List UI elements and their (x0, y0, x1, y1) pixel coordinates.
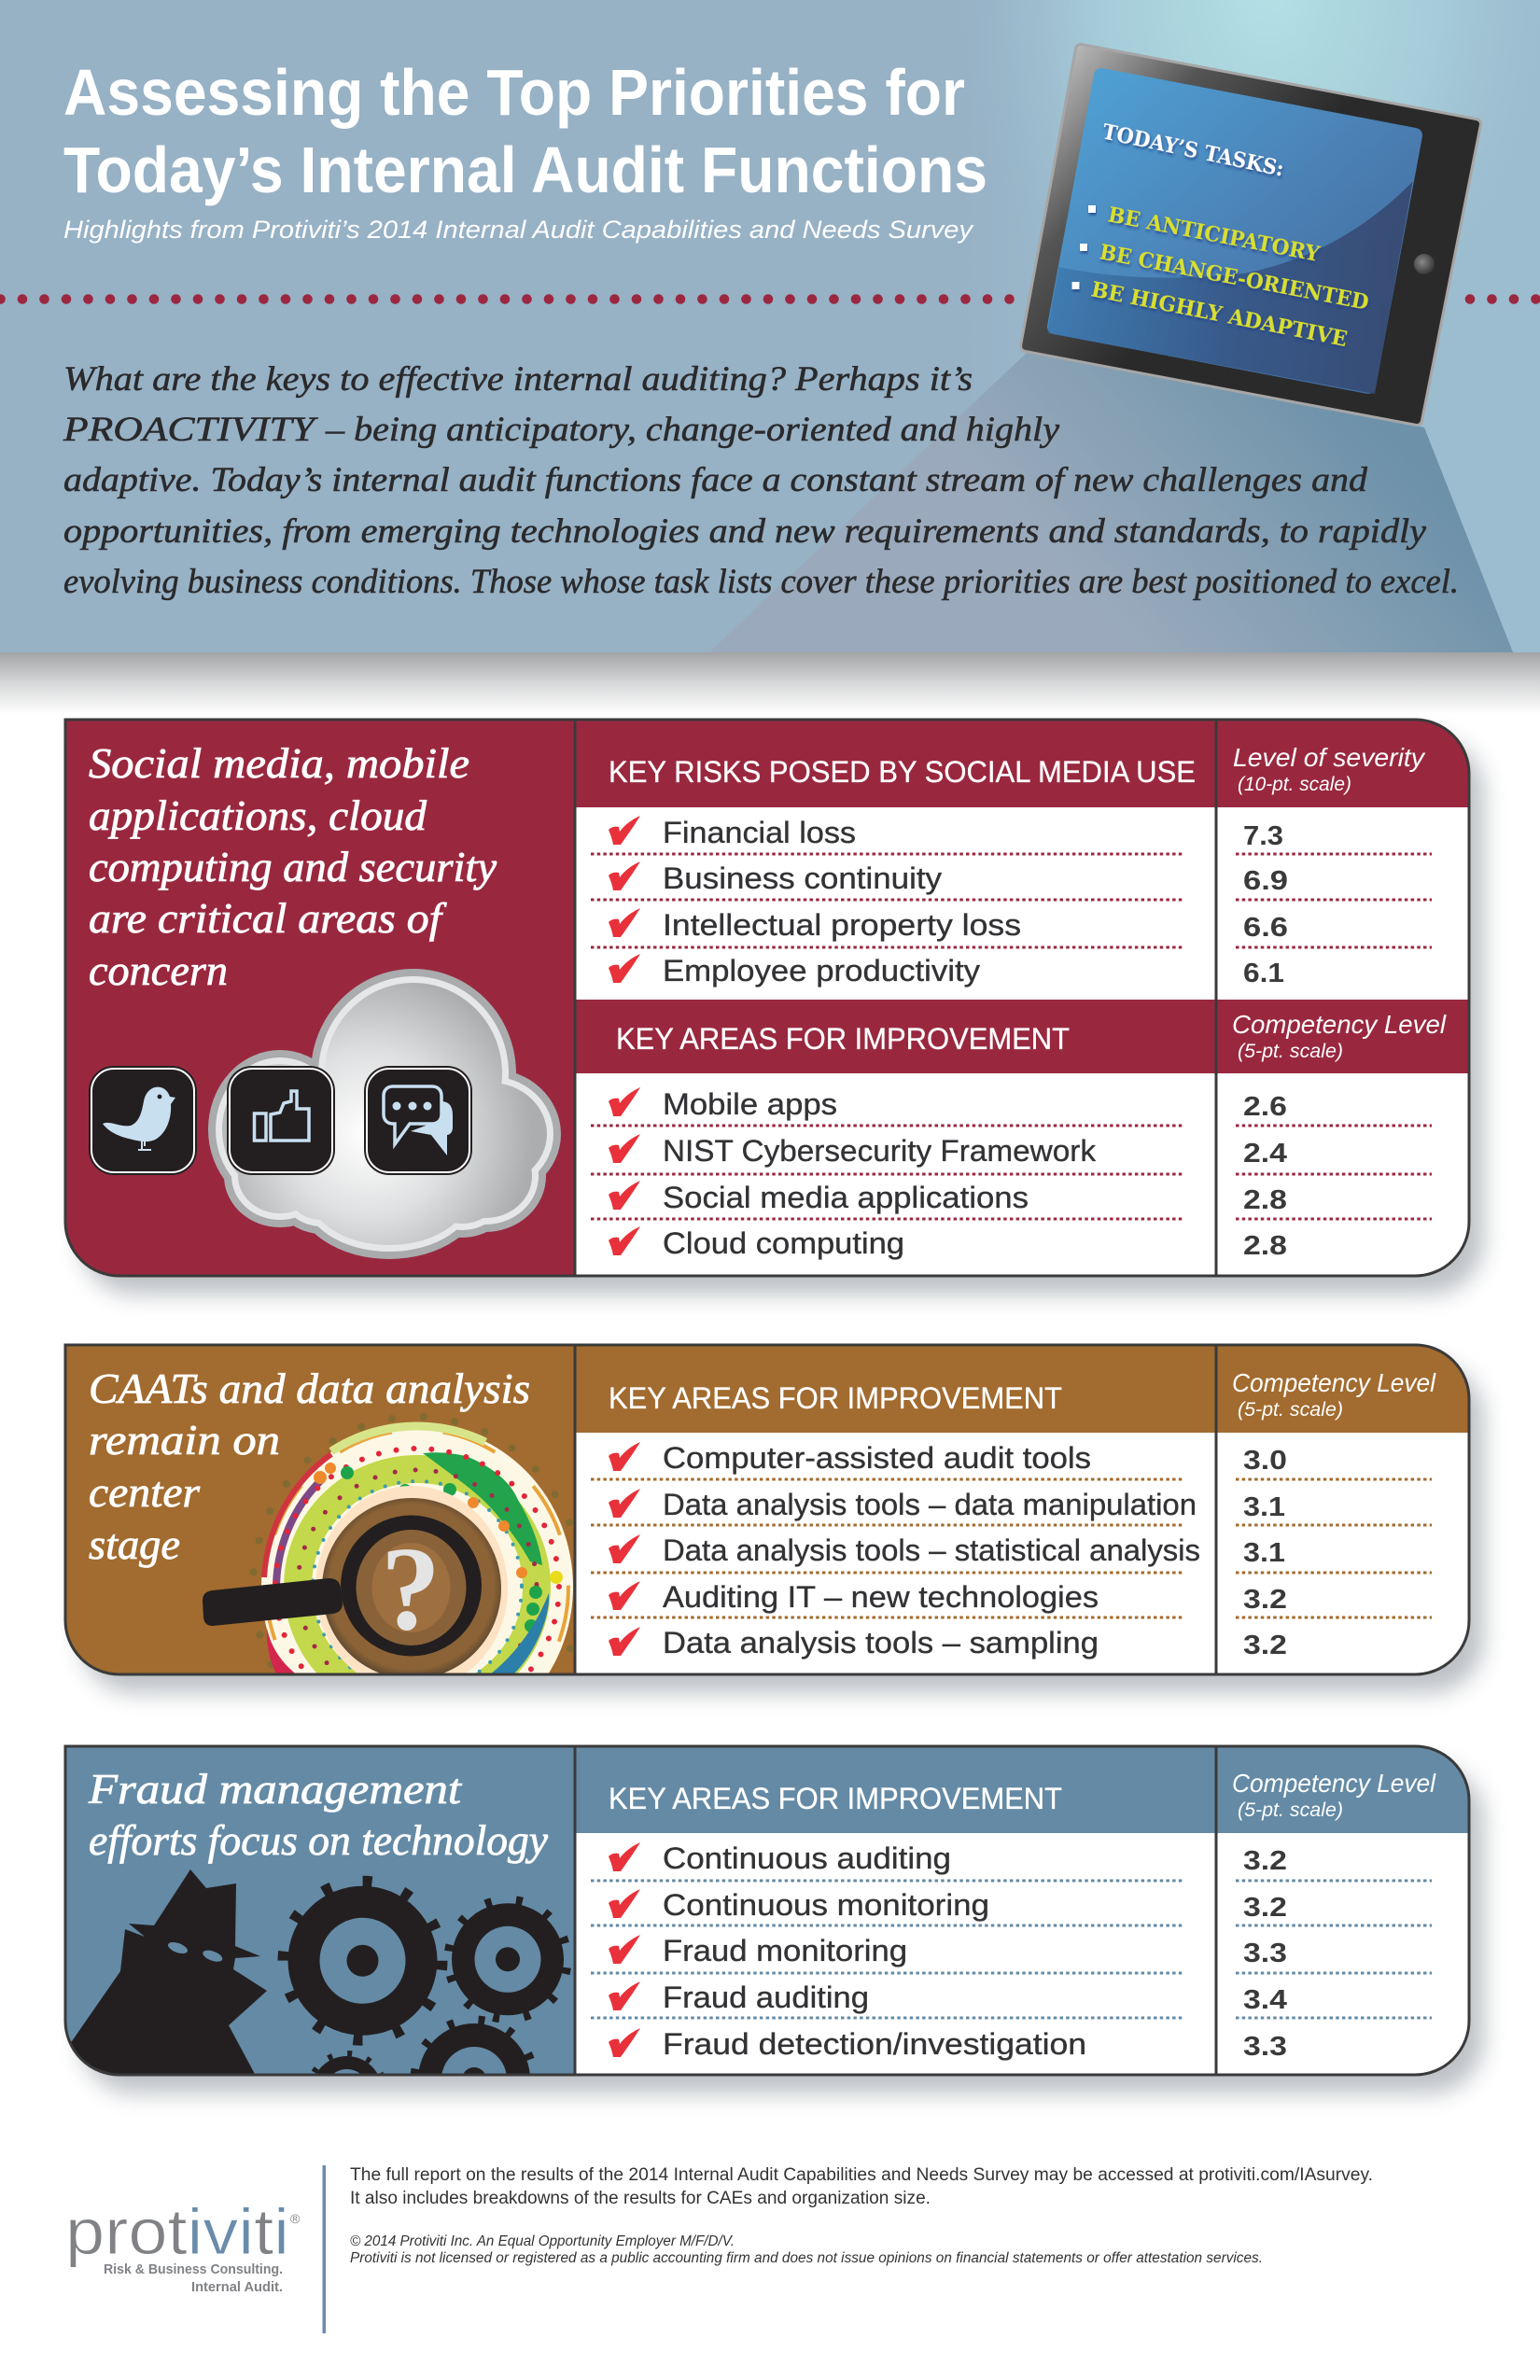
footer text (350, 2165, 1373, 2266)
table rows (591, 1441, 1432, 1660)
table rows: Fraud monitoring (663, 1934, 907, 1967)
table header: key risks (609, 743, 1426, 795)
icon: cloud (208, 969, 561, 1259)
table rows: Fraud auditing (663, 1981, 869, 2014)
table header: KEY AREAS FOR IMPROVEMENT (609, 1381, 1062, 1415)
table rows: key risks: 6.9 (1243, 866, 1288, 896)
table rows: 3.1 (1243, 1492, 1285, 1522)
panel heading: concern (89, 947, 228, 994)
intro paragraph: opportunities, from emerging technologies and new requirements and standards, to rapidly (63, 512, 1427, 551)
panel heading: Social media, mobile (89, 740, 469, 787)
panel: CAATs and data analysis (63, 1344, 1496, 1706)
table header (609, 1368, 1436, 1421)
table rows: 3.0 (1243, 1446, 1287, 1476)
table header: Competency Level (1232, 1769, 1436, 1798)
icon: magnifying glass over colorful swirl (203, 1413, 573, 1673)
table rows: 3.2 (1243, 1893, 1287, 1923)
table header: KEY AREAS FOR IMPROVEMENT (609, 1782, 1062, 1815)
icon: tablet with today's tasks: BE CHANGE-ORIENTED (1098, 240, 1371, 315)
table rows: 3.2 (1243, 1585, 1287, 1615)
icon: thumbs up (227, 1066, 335, 1175)
panel heading (89, 1365, 530, 1568)
table header: (5-pt. scale) (1238, 1799, 1343, 1821)
table rows: key risks: Financial loss (663, 816, 856, 849)
intro paragraph (63, 360, 1459, 601)
panel heading: stage (89, 1521, 180, 1568)
intro paragraph: evolving business conditions. Those whose task lists cover these priorities are best positioned to excel. (63, 563, 1459, 601)
header bottom shadow (0, 652, 1540, 714)
icon: tablet with today's tasks (1026, 49, 1476, 420)
table rows: 3.2 (1243, 1846, 1287, 1876)
icon: tablet with today's tasks: BE HIGHLY ADAPTIVE (1089, 277, 1350, 352)
header background (0, 0, 1540, 652)
panel heading: center (89, 1469, 201, 1516)
table rows: Data analysis tools – sampling (663, 1626, 1099, 1659)
table header: Competency Level (1232, 1368, 1436, 1397)
table rows: key risks (591, 816, 1432, 988)
footer text: © 2014 Protiviti Inc. An Equal Opportunity Employer M/F/D/V. (350, 2233, 735, 2249)
intro paragraph: – being anticipatory, change-oriented and highly (325, 411, 1060, 449)
table rows: Auditing IT – new technologies (663, 1580, 1099, 1614)
table rows: key areas: 2.8 (1243, 1185, 1287, 1215)
table header: key areas for improvement: (5-pt. scale) (1238, 1041, 1343, 1062)
table rows: key areas: Cloud computing (663, 1226, 904, 1260)
panel heading: remain on (89, 1417, 280, 1463)
table header (609, 1769, 1436, 1821)
icon: tablet with today's tasks: BE ANTICIPATORY (1106, 203, 1322, 267)
intro paragraph: adaptive. Today’s internal audit functions face a constant stream of new challenges and (63, 461, 1368, 499)
table rows: Continuous auditing (663, 1841, 951, 1875)
table rows: key areas: 2.4 (1243, 1139, 1287, 1169)
panel heading: applications, cloud (89, 792, 427, 839)
logo: protiviti: ® (290, 2211, 301, 2226)
icon: question mark: ? (381, 1522, 441, 1655)
table header: key areas for improvement: KEY AREAS FOR IMPROVEMENT (616, 1022, 1070, 1056)
panel heading: CAATs and data analysis (89, 1365, 530, 1412)
panel heading (88, 1766, 548, 1864)
table header: key risks: KEY RISKS POSED BY SOCIAL MEDIA USE (609, 755, 1196, 789)
table rows: key risks: 6.6 (1243, 913, 1288, 943)
table rows: 3.3 (1243, 1939, 1287, 1968)
panel: fraud management (65, 1746, 1484, 2143)
intro paragraph: What are the keys to effective internal auditing? Perhaps it’s (63, 360, 973, 399)
table rows: 3.2 (1243, 1631, 1287, 1660)
table rows: key areas: Social media applications (663, 1181, 1029, 1214)
intro paragraph: PROACTIVITY (63, 411, 318, 449)
logo: protiviti: protiviti (65, 2195, 289, 2268)
logo: protiviti (65, 2195, 301, 2295)
table rows: key areas: Mobile apps (663, 1087, 837, 1121)
panel heading: are critical areas of (89, 895, 447, 942)
table header: key risks: Level of severity (1233, 743, 1426, 772)
footer text: Protiviti is not licensed or registered as a public accounting firm and does not issue opinions on financial statements or offer attestation services. (350, 2250, 1263, 2266)
logo: protiviti: Risk & Business Consulting. (104, 2261, 283, 2277)
logo: protiviti: Internal Audit. (191, 2279, 283, 2295)
title: Today’s Internal Audit Functions (63, 133, 987, 206)
title (63, 56, 987, 206)
table rows: key areas (591, 1087, 1432, 1261)
table rows: key risks: 7.3 (1243, 821, 1283, 851)
panel heading (89, 740, 497, 994)
icon: spy silhouette and gears (71, 1869, 571, 2074)
dotted divider (0, 294, 1540, 304)
table rows: Data analysis tools – data manipulation (663, 1488, 1197, 1521)
panel heading: Fraud management (88, 1766, 463, 1813)
table header: key areas for improvement: Competency Level (1232, 1010, 1447, 1039)
table rows: key areas: 2.8 (1243, 1231, 1287, 1261)
icon: tablet with today's tasks: TODAY’S TASKS: (1100, 119, 1286, 182)
footer text: The full report on the results of the 2014 Internal Audit Capabilities and Needs Survey may be accessed at protiviti.com/IAsurvey. (350, 2165, 1373, 2185)
icon: chat bubbles (364, 1066, 472, 1175)
table header: key areas for improvement (616, 1010, 1447, 1062)
table rows: Computer-assisted audit tools (663, 1441, 1091, 1475)
table rows: Continuous monitoring (663, 1888, 989, 1922)
table header: key risks: (10-pt. scale) (1238, 774, 1351, 795)
table rows: 3.4 (1243, 1985, 1287, 2015)
title: Assessing the Top Priorities for (63, 56, 965, 129)
panel heading: computing and security (89, 844, 497, 890)
icon: twitter bird (89, 1066, 197, 1175)
table rows: 3.1 (1243, 1538, 1285, 1568)
table header: (5-pt. scale) (1238, 1399, 1343, 1421)
table rows: key areas: NIST Cybersecurity Framework (663, 1134, 1097, 1168)
table rows: Data analysis tools – statistical analysis (663, 1533, 1200, 1567)
table rows: key risks: Business continuity (663, 861, 942, 895)
table rows: key risks: Intellectual property loss (663, 908, 1021, 942)
table rows: key risks: Employee productivity (663, 954, 980, 987)
subtitle: Highlights from Protiviti’s 2014 Internal Audit Capabilities and Needs Survey (63, 216, 974, 244)
table rows: key risks: 6.1 (1243, 959, 1284, 988)
table rows (591, 1841, 1432, 2062)
table rows: 3.3 (1243, 2032, 1287, 2062)
footer divider (323, 2165, 326, 2333)
panel heading: efforts focus on technology (89, 1817, 548, 1864)
footer text: It also includes breakdowns of the results for CAEs and organization size. (350, 2189, 931, 2208)
table rows: Fraud detection/investigation (663, 2027, 1086, 2061)
panel: social media and security (65, 720, 1484, 1295)
table rows: key areas: 2.6 (1243, 1092, 1287, 1122)
